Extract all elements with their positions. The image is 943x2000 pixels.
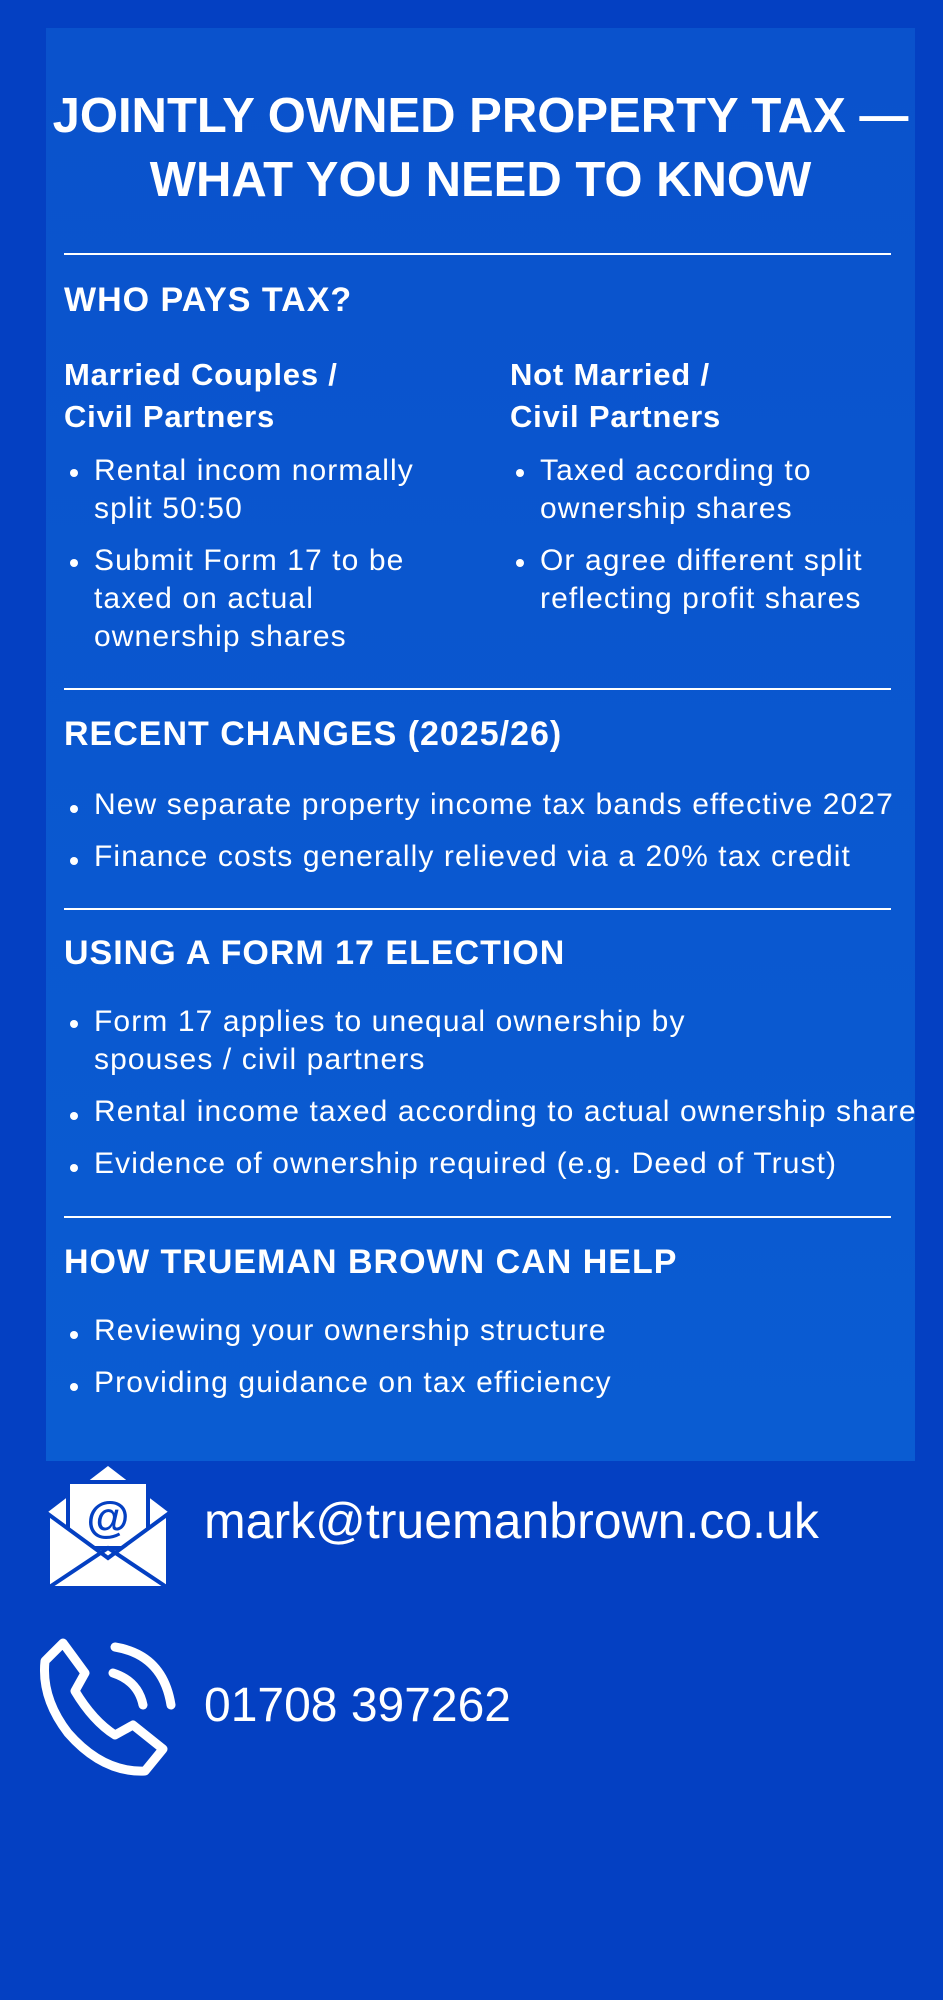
email text: mark@truemanbrown.co.uk <box>204 1493 819 1549</box>
subheading: married: Civil Partners <box>64 399 275 434</box>
bullet list: married: split 50:50 <box>94 492 243 525</box>
column: married couples <box>64 357 414 653</box>
bullet list: help: Providing guidance on tax efficiency <box>94 1366 612 1399</box>
bullet list: form 17: Evidence of ownership required (e.g. Deed of Trust) <box>94 1147 837 1180</box>
icon: email envelope: @ <box>87 1493 129 1542</box>
bullet list: recent changes: Finance costs generally relieved via a 20% tax credit <box>94 840 851 873</box>
subheading: not married: Not Married / <box>510 357 710 392</box>
bullet list: form 17: Rental income taxed according to actual ownership shares <box>94 1095 915 1128</box>
heading: who pays tax: WHO PAYS TAX? <box>64 281 352 319</box>
bullet list: not married: Or agree different split <box>540 544 863 577</box>
icon: phone <box>40 1638 176 1776</box>
bullet list: not married: Taxed according to <box>540 454 812 487</box>
bullet list: form 17: Form 17 applies to unequal ownership by <box>94 1005 686 1038</box>
bullet list: married: ownership shares <box>94 620 347 653</box>
panel: main content: reflecting profit shares <box>540 582 862 615</box>
title: WHAT YOU NEED TO KNOW <box>150 153 811 207</box>
subheading: married <box>64 357 338 434</box>
title: JOINTLY OWNED PROPERTY TAX — <box>53 89 908 143</box>
bullet list: form 17 <box>70 1005 915 1180</box>
bullet list: married: taxed on actual <box>94 582 314 615</box>
subheading: not married <box>510 357 721 434</box>
bullet list: form 17: spouses / civil partners <box>94 1043 426 1076</box>
bullet list: married <box>70 454 414 653</box>
heading: form 17: USING A FORM 17 ELECTION <box>64 934 565 972</box>
heading: recent changes: RECENT CHANGES (2025/26) <box>64 715 562 753</box>
bullet list: not married <box>516 454 863 615</box>
bullet list: married: Submit Form 17 to be <box>94 544 404 577</box>
bullet list: help <box>70 1314 612 1399</box>
title <box>53 89 908 207</box>
icon: email envelope <box>48 1466 168 1586</box>
panel: main content <box>46 28 915 1461</box>
bullet list: not married: ownership shares <box>540 492 793 525</box>
bullet list: help: Reviewing your ownership structure <box>94 1314 607 1347</box>
subheading: married: Married Couples / <box>64 357 338 392</box>
subheading: not married: Civil Partners <box>510 399 721 434</box>
bullet list: recent changes: New separate property income tax bands effective 2027 <box>94 788 894 821</box>
bullet list: married: Rental incom normally <box>94 454 414 487</box>
bullet list: recent changes <box>70 788 894 873</box>
heading: how trueman brown can help: HOW TRUEMAN BROWN CAN HELP <box>64 1243 677 1281</box>
column: not married <box>510 357 863 615</box>
phone text: 01708 397262 <box>204 1679 511 1732</box>
